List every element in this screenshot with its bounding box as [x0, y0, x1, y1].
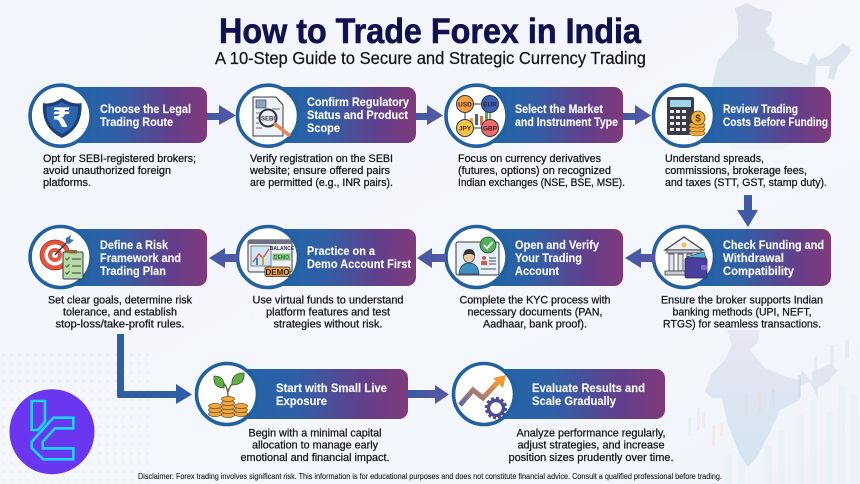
- heading: [723, 102, 828, 129]
- heading: Open and Verify: [515, 238, 599, 252]
- description: Aadhaar, bank proof).: [483, 318, 587, 330]
- heading: [307, 95, 409, 135]
- description: position sizes prudently over time.: [508, 452, 674, 464]
- heading: and Instrument Type: [515, 115, 618, 129]
- description: Complete the KYC process with: [460, 294, 610, 306]
- icon: document with magnifier: [253, 97, 289, 136]
- description: commissions, brokerage fees,: [665, 165, 807, 177]
- icon: ID card with check: [456, 237, 499, 275]
- background candlesticks: [688, 340, 849, 445]
- heading: Costs Before Funding: [723, 115, 828, 129]
- step 2: confirm regulatory status: [238, 85, 416, 189]
- arrow 2 to 3: [416, 105, 443, 125]
- description: and taxes (STT, GST, stamp duty).: [665, 177, 827, 189]
- arrow 9 to 10: [408, 385, 449, 404]
- heading: [532, 381, 645, 408]
- description: [665, 153, 827, 189]
- heading: [100, 102, 191, 129]
- step 9: start with small live exposure: [196, 364, 408, 464]
- heading: Account: [515, 264, 559, 278]
- icon: demo window: DEMO: [266, 268, 290, 277]
- heading: [100, 238, 181, 278]
- description: [249, 153, 393, 189]
- heading: Select the Market: [515, 102, 603, 116]
- arrow 3 to 4: [623, 105, 651, 125]
- heading: Trading Plan: [100, 264, 166, 278]
- step 1: choose the legal trading route: [30, 85, 207, 189]
- heading: Check Funding and: [723, 238, 824, 252]
- icon: bank and wallet: [665, 237, 707, 278]
- icon: plant on coins: [208, 373, 248, 418]
- icon: currency network: JPY: [459, 126, 472, 132]
- description: Begin with a minimal capital: [248, 428, 382, 440]
- arrow 4 down to 5: [737, 195, 758, 227]
- icon: target and checklist: [40, 235, 83, 279]
- description: platform features and test: [266, 306, 390, 318]
- heading: Scale Gradually: [532, 394, 616, 408]
- icon: growth arrow and gear: [460, 375, 506, 418]
- step 6: open and verify account: [446, 226, 623, 330]
- description: RTGS) for seamless transactions.: [663, 318, 821, 330]
- description: Focus on currency derivatives: [458, 153, 602, 165]
- description: [48, 294, 193, 330]
- heading: Trading Route: [100, 115, 173, 129]
- background map of India, upper: [712, 3, 852, 150]
- heading: Evaluate Results and: [532, 381, 645, 395]
- description: avoid unauthorized foreign: [43, 165, 171, 177]
- description: Understand spreads,: [665, 153, 764, 165]
- title: How to Trade Forex in India: [219, 12, 641, 51]
- heading: Withdrawal: [723, 251, 784, 265]
- heading: Scope: [307, 121, 340, 135]
- arrow 5 to 6: [625, 248, 655, 268]
- description: [661, 294, 823, 330]
- heading: [515, 102, 618, 129]
- heading: Define a Risk: [100, 238, 168, 252]
- background map of India, lower: [705, 330, 838, 467]
- description: Ensure the broker supports Indian: [661, 294, 823, 306]
- heading: Status and Product: [307, 108, 408, 122]
- description: [508, 428, 674, 464]
- description: Verify registration on the SEBI: [250, 153, 393, 165]
- elbow arrow 8 to 9: [117, 334, 192, 404]
- description: emotional and financial impact.: [240, 452, 390, 464]
- description: Indian exchanges (NSE, BSE, MSE).: [458, 177, 625, 189]
- description: necessary documents (PAN,: [468, 306, 602, 318]
- icon: shield with rupee: [43, 98, 82, 138]
- heading: [276, 381, 387, 408]
- step 5: check funding compatibility: [654, 226, 831, 330]
- subtitle: A 10-Step Guide to Secure and Strategic Currency Trading: [215, 48, 646, 68]
- icon: document with magnifier: SEBI: [261, 116, 275, 122]
- logo: [10, 389, 94, 474]
- icon: calculator and coins: [667, 97, 705, 136]
- icon: demo window: [248, 240, 295, 277]
- heading: Exposure: [276, 394, 327, 408]
- description: adjust strategies, and increase: [518, 440, 664, 452]
- icon: demo window: BALANCE: [270, 246, 295, 252]
- disclaimer: Disclaimer: Forex trading involves significant risk. This information is for educational purposes and does not constitute financial advice. Consult a qualified professional before trading.: [138, 472, 722, 481]
- description: Opt for SEBI-registered brokers;: [43, 153, 196, 165]
- heading: [723, 238, 824, 278]
- description: allocation to manage early: [252, 440, 379, 452]
- icon: demo window: DEMO: [274, 255, 289, 261]
- arrow 1 to 2: [207, 105, 236, 125]
- arrow 6 to 7: [417, 248, 446, 268]
- arrow 7 to 8: [209, 248, 238, 268]
- icon: currency network: [456, 96, 498, 136]
- description: [240, 428, 390, 464]
- description: banking methods (UPI, NEFT,: [672, 306, 812, 318]
- description: [458, 153, 625, 189]
- description: strategies without risk.: [274, 318, 382, 330]
- icon: currency network: EUR: [483, 102, 497, 108]
- description: platforms.: [43, 177, 91, 189]
- heading: Review Trading: [723, 102, 798, 116]
- step 7: practice on a demo account: [238, 226, 416, 330]
- heading: Start with Small Live: [276, 381, 387, 395]
- heading: Compatibility: [723, 264, 794, 278]
- description: Set clear goals, determine risk: [48, 294, 193, 306]
- step 8: define a risk framework: [30, 226, 207, 330]
- step 3: select the market: [446, 85, 625, 189]
- heading: Practice on a: [307, 244, 375, 258]
- heading: Framework and: [100, 251, 181, 265]
- icon: currency network: USD: [458, 102, 472, 108]
- icon: shield with rupee: ₹: [52, 103, 71, 134]
- description: Use virtual funds to understand: [252, 294, 404, 306]
- description: (futures, options) on recognized: [458, 165, 611, 177]
- step 10: evaluate results and scale: [454, 364, 674, 464]
- heading: Choose the Legal: [100, 102, 191, 116]
- icon: calculator and coins: $: [695, 114, 701, 124]
- description: stop-loss/take-profit rules.: [56, 318, 184, 330]
- heading: Demo Account First: [307, 257, 411, 271]
- heading: Confirm Regulatory: [307, 95, 409, 109]
- description: website; ensure offered pairs: [249, 165, 391, 177]
- icon: currency network: GBP: [483, 126, 498, 132]
- description: [252, 294, 404, 330]
- description: [460, 294, 610, 330]
- step 4: review trading costs: [654, 85, 831, 189]
- heading: [515, 238, 599, 278]
- heading: [307, 244, 411, 271]
- description: Analyze performance regularly,: [516, 428, 666, 440]
- heading: Your Trading: [515, 251, 582, 265]
- description: tolerance, and establish: [63, 306, 177, 318]
- description: [43, 153, 196, 189]
- description: are permitted (e.g., INR pairs).: [250, 177, 393, 189]
